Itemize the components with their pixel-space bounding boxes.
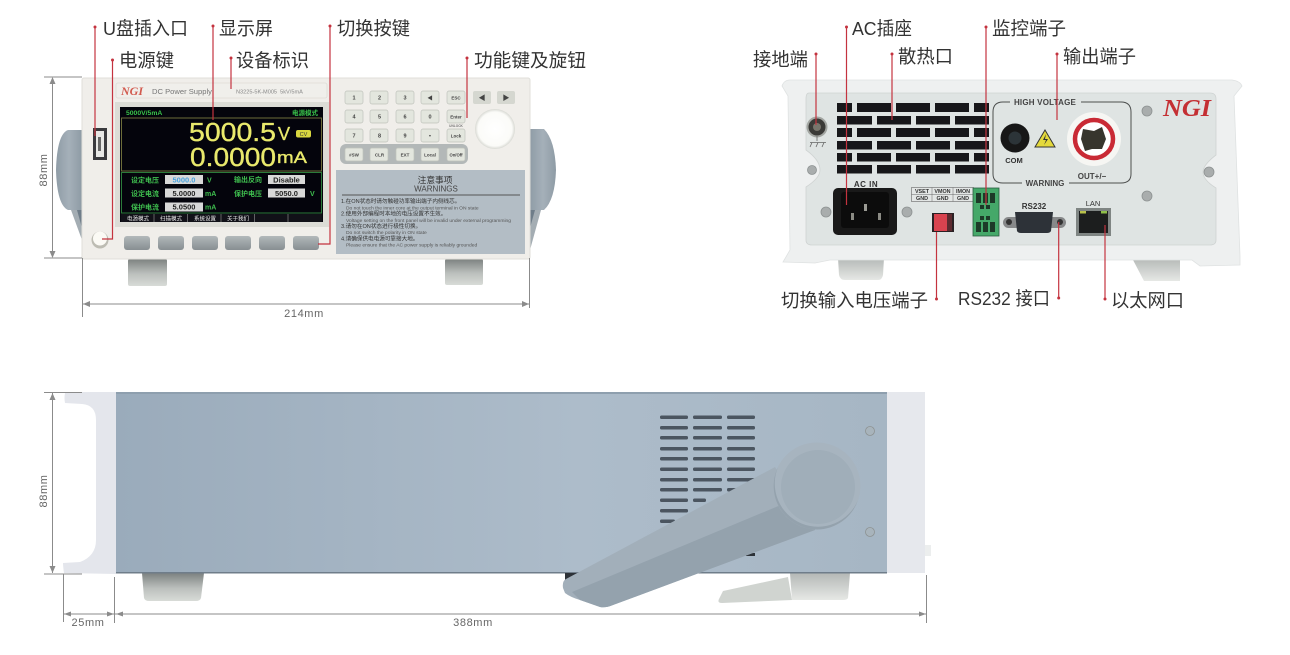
warnings plate: Do not touch the inner core at the output terminal in ON state [346,206,479,212]
panel: rear view [782,80,1242,281]
callout: USB port: U盘插入口 [103,18,188,39]
USB port [93,128,107,160]
grounding post [808,118,826,147]
callouts [94,18,1184,311]
callout: display [212,18,273,120]
dimension: side height 88mm: 88mm [38,475,50,507]
rear plate [806,93,1216,245]
keypad: Lock [451,134,462,138]
monitor label table: GND [937,196,949,202]
display screen: 5.0000 [173,189,195,198]
screws [808,106,1214,217]
display screen: 电源模式 [127,214,149,222]
display screen: Disable [273,176,300,184]
high voltage output panel: COM [1005,156,1023,165]
display screen: mA [205,204,216,212]
green monitor terminal [973,188,999,236]
warnings plate: 注意事项 [418,174,453,185]
callout: power key: 电源键 [119,50,174,71]
RS232 connector [1003,202,1066,233]
display screen: 5000.0 [173,176,195,184]
display screen: 保护电压 [234,189,262,198]
dimension: handle depth 25mm [64,574,114,629]
display screen: mA [205,191,216,198]
dimension: side height 88mm [38,392,82,574]
dimension: body depth 388mm [115,575,926,629]
warnings plate: Do not switch the polarity in ON state [346,230,427,236]
display screen: 5000V/5mA [126,110,162,117]
display screen: 5.0500 [173,202,195,212]
dimension: front height 88mm [38,77,82,258]
keypad: ▶ [502,94,510,102]
high voltage output panel: WARNING [1026,179,1064,188]
keypad: CLR [375,152,385,158]
display screen: V [310,191,315,198]
keypad [340,91,515,164]
warnings plate: 1.在ON状态时请勿触碰功率输出端子内侧线芯。 [341,197,460,205]
keypad: 0 [428,114,432,120]
display screen: 系统设置 [194,214,216,222]
callout: USB port [94,18,188,136]
keypad: • [429,134,431,140]
callout: AC socket: AC插座 [852,18,912,39]
display screen: 扫描模式 [160,214,182,222]
display screen: 设定电流 [131,189,159,198]
callout: ethernet [1104,225,1184,311]
display screen: 保护电流 [131,202,159,212]
input voltage switch [932,213,954,232]
keypad: Enter [450,114,462,120]
brand strip: N3225-5K-M005 5kV/5mA [236,90,303,96]
keypad: ◀ [427,95,433,102]
display screen: V [207,178,212,184]
rotating handle [563,442,860,607]
monitor label table: IMON [956,189,970,195]
callout: output terminal [1056,46,1136,120]
display screen: V [278,124,290,144]
keypad: ◀ [478,94,486,102]
keypad: 6 [403,114,407,120]
dimension: front width 214mm [82,258,530,320]
callout: function keys and knob: 功能键及旋钮 [474,50,586,71]
LAN port [1076,199,1111,236]
callout: AC socket [845,18,912,205]
warnings plate: 4.请确保供电电源可靠接大地。 [341,234,418,242]
callout: device ID: 设备标识 [236,50,309,71]
callout: power key [102,50,174,239]
keypad: 2 [378,96,381,102]
dimension: body depth 388mm: 388mm [453,617,493,629]
keypad: 9 [403,134,407,140]
display screen [115,102,329,227]
side vents [660,416,755,523]
keypad: #SW [349,152,360,158]
warnings plate: 2.使用外部编程时本地的电压设置不生效。 [341,210,446,218]
panel: side view [38,392,931,629]
display screen: 输出反向 [234,175,262,184]
callout: RS232 [958,222,1060,309]
display screen: mA [277,149,307,167]
display screen: 设定电压 [131,176,159,184]
feet [142,573,850,603]
keypad: ESC [451,96,461,100]
warnings plate: Please ensure that the AC power supply is reliably grounded [346,242,477,248]
dimension: front width 214mm: 214mm [284,308,324,320]
display screen: 0.0000 [190,144,276,172]
dimension: front height 88mm: 88mm [38,154,50,186]
keypad: 5 [378,114,381,120]
callout: input voltage switch terminal [781,232,938,311]
rear chassis [782,80,1242,266]
display screen: 关于我们 [227,214,249,222]
display screen: CV [300,132,308,138]
monitor label table: VMON [934,189,951,195]
warnings plate: Voltage setting on the front panel will be invalid under external programming [346,218,511,224]
brand strip: DC Power Supply [152,87,212,96]
callout: monitor terminal: 监控端子 [992,18,1066,39]
NGI logo: NGI [1162,96,1213,122]
callout: ethernet: 以太网口 [1111,290,1184,311]
display screen: 电源模式 [292,108,318,117]
warnings plate: WARNINGS [414,184,458,194]
power button [92,232,108,248]
callout: RS232: RS232 接口 [958,288,1050,309]
keypad: On/Off [449,152,463,158]
high voltage output panel: HIGH VOLTAGE [1014,98,1077,107]
high voltage output panel: OUT+/− [1078,172,1107,181]
dimension: handle depth 25mm: 25mm [72,617,104,629]
front panel body [82,78,530,259]
display screen: 5000.5 [189,119,276,147]
keypad: 4 [352,114,356,120]
callout: function keys and knob [466,50,586,118]
left bumper [63,392,116,574]
side screws [866,426,874,536]
callout: switch keys: 切换按键 [337,18,410,39]
AC socket [833,180,897,235]
monitor label table: GND [916,196,928,202]
keypad: 8 [378,134,381,140]
keypad: UNLOCK [449,124,464,128]
heat vents [837,103,989,174]
keypad: 1 [352,96,356,102]
callout: heat vents [890,46,953,120]
body side [116,392,887,574]
rear feet [838,258,1180,281]
keypad: Local [424,152,436,158]
panel: front view [38,77,556,320]
high voltage output panel [993,98,1131,188]
LAN port: LAN [1086,199,1100,208]
monitor label table: VSET [915,189,930,195]
keypad: EXT [401,152,410,158]
display screen: 5050.0 [275,189,298,198]
warnings plate [336,170,525,254]
monitor label table: GND [957,196,969,202]
right bumper [887,392,931,573]
callout: switch keys [318,18,410,244]
right carry handle [530,129,556,250]
callout: output terminal: 输出端子 [1063,46,1136,67]
brand strip: NGI [120,84,144,98]
callout: ground terminal: 接地端 [753,49,808,70]
front feet [128,259,483,286]
callout: ground terminal [753,49,818,125]
rotary knob [475,109,515,149]
warnings plate: 3.请勿在ON状态进行极性切换。 [341,222,421,230]
callout: device ID [230,50,309,89]
callout: monitor terminal [984,18,1066,205]
AC socket: AC IN [854,180,878,189]
keypad: 3 [403,96,407,102]
monitor label table [912,188,974,202]
keypad: 7 [352,134,356,140]
soft keys [124,236,319,250]
RS232 connector: RS232 [1022,202,1047,211]
callout: display: 显示屏 [219,18,273,39]
left carry handle [56,130,82,240]
brand strip [116,83,327,98]
callout: heat vents: 散热口 [898,46,953,67]
callout: input voltage switch terminal: 切换输入电压端子 [781,290,928,311]
